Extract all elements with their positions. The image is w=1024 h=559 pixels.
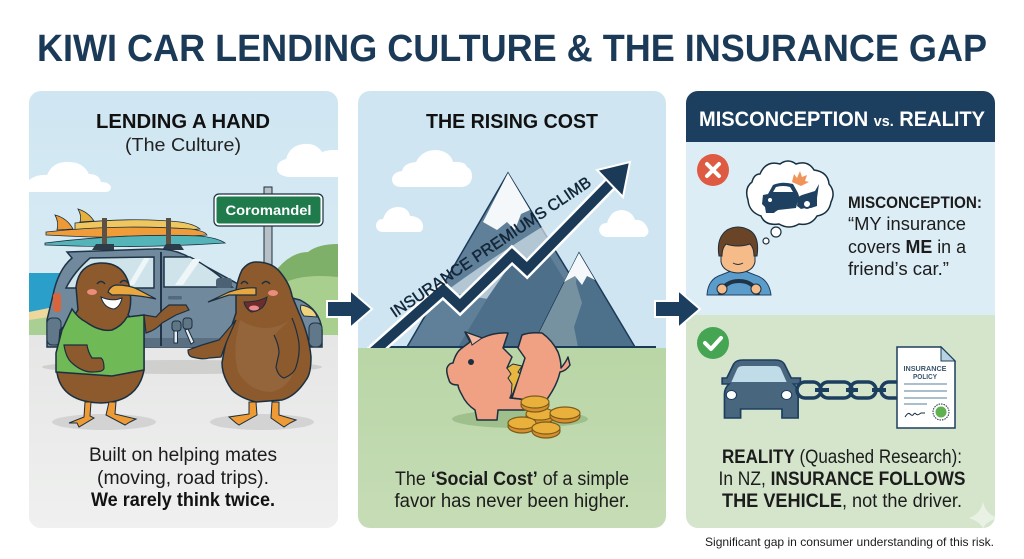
text block: reality: REALITY (Quashed Research): — [722, 447, 962, 468]
header: misconception vs reality: MISCONCEPTION vs. REALITY — [699, 108, 985, 131]
text block: social cost caption — [394, 469, 630, 512]
road sign: Coromandel: Coromandel — [226, 202, 312, 218]
panel: the culture — [29, 91, 338, 528]
icon: insurance policy document — [897, 347, 955, 428]
icon: smiling kiwi — [188, 262, 311, 427]
icon: car keys — [172, 318, 194, 344]
text block: culture caption: Built on helping mates — [89, 445, 277, 466]
text block: culture caption — [89, 445, 277, 511]
icon: red cross — [697, 154, 729, 186]
text block: culture caption: We rarely think twice. — [91, 490, 275, 511]
text block: misconception: “MY insurance — [848, 213, 966, 234]
heading: lending a hand: (The Culture) — [125, 135, 241, 155]
text block: culture caption: (moving, road trips). — [97, 468, 269, 489]
heading: the rising cost: THE RISING COST — [426, 111, 598, 133]
text block: reality: THE VEHICLE, not the driver. — [722, 491, 962, 512]
text block: reality: In NZ, INSURANCE FOLLOWS — [718, 469, 966, 490]
arrow: cost to reality — [655, 290, 700, 328]
road sign: Coromandel — [214, 187, 323, 277]
arrow: culture to cost — [327, 290, 372, 328]
text block: misconception: MISCONCEPTION: — [848, 193, 982, 212]
title: KIWI CAR LENDING CULTURE & THE INSURANCE GAP — [37, 28, 987, 70]
icon: driver at wheel — [707, 227, 771, 295]
footnote: Significant gap in consumer understanding of this risk. — [705, 535, 994, 549]
illustration: mountains — [407, 173, 635, 347]
icon: coins — [508, 396, 580, 438]
panel: misconception vs reality — [686, 91, 998, 529]
icon: car with surfboards — [45, 209, 322, 347]
text block: misconception: covers ME in a — [848, 236, 967, 257]
icon: chained car — [722, 360, 800, 418]
icon: insurance policy document: INSURANCE — [904, 366, 947, 373]
panel: the rising cost — [358, 91, 666, 528]
icon: green check — [697, 327, 729, 359]
icon: thought bubble with crash — [747, 161, 833, 244]
heading: lending a hand — [96, 111, 270, 155]
arrow: premiums climbing — [368, 162, 656, 353]
icon: insurance policy document: POLICY — [913, 374, 937, 381]
icon: chain — [797, 382, 905, 398]
text block: reality — [718, 447, 966, 512]
icon: broken piggy bank — [447, 332, 588, 428]
text block: misconception: friend’s car.” — [848, 258, 949, 279]
text block: misconception — [848, 193, 982, 279]
heading: lending a hand: LENDING A HAND — [96, 111, 270, 133]
icon: kiwi in green shirt — [56, 263, 189, 427]
text block: social cost caption: The ‘Social Cost’ of a simple — [395, 469, 629, 490]
text block: social cost caption: favor has never been higher. — [394, 491, 630, 512]
arrow label: INSURANCE PREMIUMS CLIMB — [388, 174, 595, 321]
